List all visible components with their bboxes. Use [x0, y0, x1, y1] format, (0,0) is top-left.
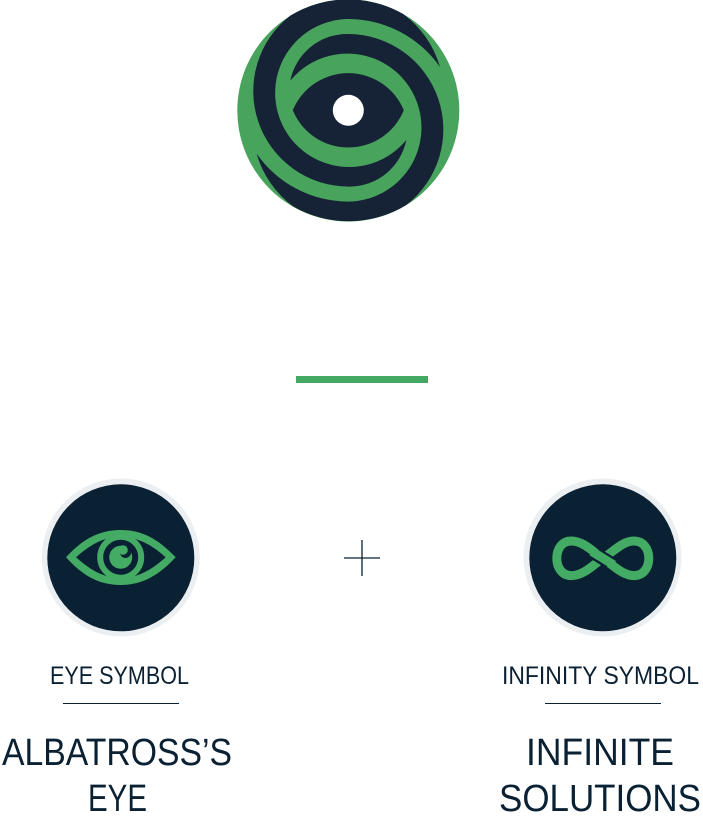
- heading: infinite solutions: [499, 732, 701, 820]
- green divider bar: [296, 376, 428, 383]
- icon: eye symbol badge: [42, 478, 200, 636]
- label: eye symbol: EYE SYMBOL: [50, 662, 189, 690]
- plus sign: [344, 540, 380, 576]
- logo: spiral eye: [237, 0, 459, 222]
- heading: albatross's eye: EYE: [88, 778, 147, 820]
- heading: albatross's eye: ALBATROSS’S: [2, 732, 232, 774]
- icon: infinity symbol badge: [524, 478, 682, 636]
- heading: albatross's eye: [2, 732, 232, 820]
- heading: infinite solutions: INFINITE: [526, 732, 674, 774]
